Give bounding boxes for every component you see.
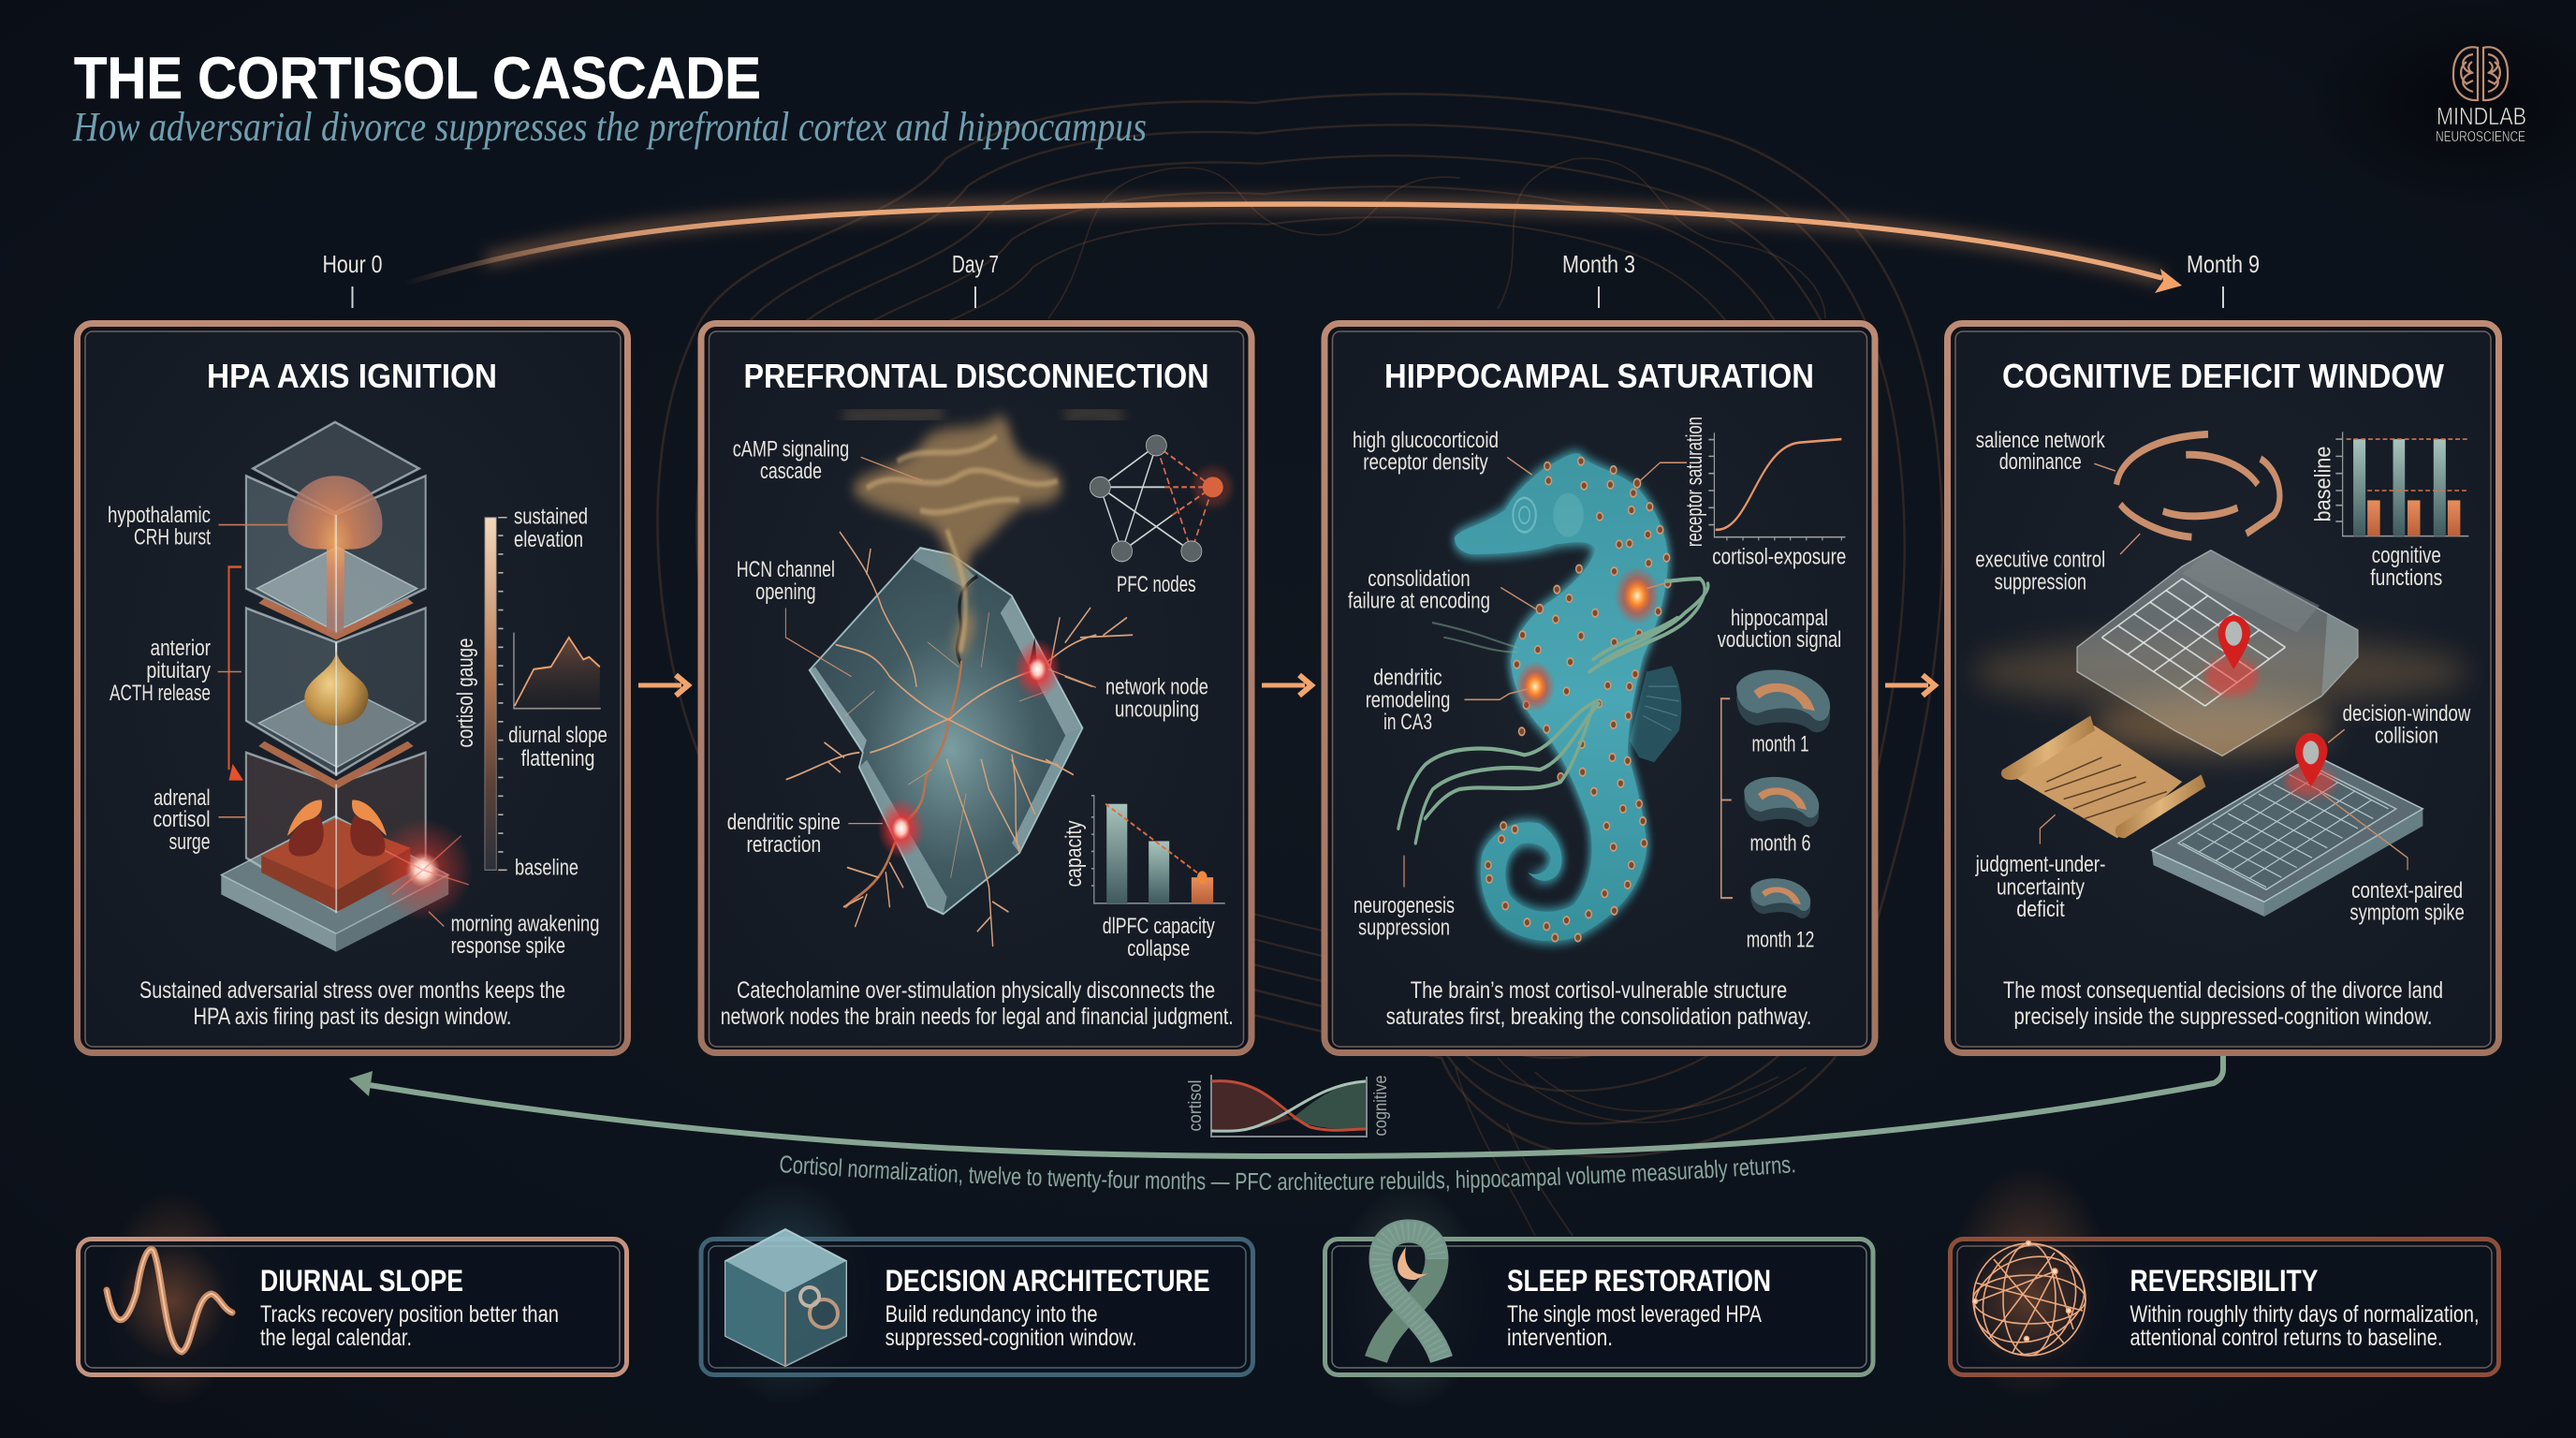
chart: receptor saturation curve xyxy=(1682,417,1845,547)
heading: HIPPOCAMPAL SATURATION xyxy=(1384,357,1814,395)
labels: uncoupling xyxy=(1115,697,1199,723)
labels: failure at encoding xyxy=(1348,588,1490,614)
illustration: seahorse hippocampus xyxy=(1398,453,1708,942)
panel caption xyxy=(721,977,1234,1030)
card: sleep restoration: SLEEP RESTORATION xyxy=(1507,1264,1771,1298)
labels: neurogenesis xyxy=(1354,893,1455,918)
timeline marker: Day 7 xyxy=(952,250,999,308)
labels: ACTH release xyxy=(110,681,211,706)
labels: cognitive xyxy=(2372,543,2441,568)
recovery arc: return arrow xyxy=(349,1056,2223,1156)
illustration: shrinking hippocampal slices xyxy=(1721,670,1830,918)
panel caption: Catecholamine over-stimulation physically disconnects the xyxy=(737,977,1215,1004)
labels xyxy=(108,503,607,959)
labels: consolidation xyxy=(1368,566,1471,592)
card: diurnal slope: Tracks recovery position better than xyxy=(260,1301,559,1328)
icon: wireframe sphere xyxy=(1963,1231,2096,1368)
subtitle: How adversarial divorce suppresses the prefrontal cortex and hippocampus xyxy=(72,104,1147,150)
labels: suppression xyxy=(1358,915,1450,940)
timeline marker: Month 9 xyxy=(2187,250,2260,308)
logo: NEUROSCIENCE xyxy=(2436,129,2525,145)
card: diurnal slope: DIURNAL SLOPE xyxy=(260,1264,463,1298)
labels: executive control xyxy=(1975,548,2105,573)
panel: prefrontal disconnection xyxy=(701,324,1251,1052)
card: reversibility xyxy=(1950,1166,2499,1400)
labels: deficit xyxy=(2016,897,2065,922)
card: diurnal slope: the legal calendar. xyxy=(260,1325,412,1351)
labels: collision xyxy=(2375,723,2438,748)
panel caption: The most consequential decisions of the divorce land xyxy=(2003,977,2443,1004)
labels: HCN channel xyxy=(737,557,835,582)
labels: cascade xyxy=(760,459,822,484)
panel caption xyxy=(139,977,565,1030)
labels: decision-window xyxy=(2343,701,2471,726)
labels: response spike xyxy=(451,933,565,959)
labels: in CA3 xyxy=(1383,710,1432,735)
timeline marker: Hour 0: Hour 0 xyxy=(322,250,382,278)
illustration: glass calendar tray, scroll and tablet xyxy=(1972,463,2468,917)
chart: receptor saturation curve: receptor saturation xyxy=(1682,417,1707,547)
illustration: glass cube stack xyxy=(218,422,473,952)
logo xyxy=(2312,0,2576,206)
panel caption: precisely inside the suppressed-cognition window. xyxy=(2014,1004,2432,1030)
card: decision architecture: suppressed-cognition window. xyxy=(886,1325,1137,1351)
recovery caption on curve: Cortisol normalization, twelve to twenty-four months — PFC architecture rebuilds, hippocampal volume measurably returns. xyxy=(781,1155,1795,1193)
panel caption xyxy=(2003,977,2443,1030)
labels: hypothalamic xyxy=(108,503,211,528)
labels: hippocampal xyxy=(1731,606,1828,631)
bar chart: dlPFC capacity xyxy=(1061,796,1225,903)
card: sleep restoration: intervention. xyxy=(1507,1325,1613,1351)
labels: surge xyxy=(168,829,210,855)
labels: dlPFC capacity xyxy=(1103,914,1215,939)
panel: HPA axis ignition xyxy=(77,324,627,1052)
labels: context-paired xyxy=(2351,878,2463,903)
labels: elevation xyxy=(514,527,583,552)
labels: judgment-under- xyxy=(1975,852,2105,877)
labels: morning awakening xyxy=(451,912,599,937)
timeline arc: escalation arrow xyxy=(404,204,2182,293)
labels: salience network xyxy=(1976,428,2106,453)
timeline marker: Day 7: Day 7 xyxy=(952,250,999,278)
card: sleep restoration: The single most leveraged HPA xyxy=(1507,1301,1762,1328)
labels: pituitary xyxy=(146,658,211,683)
labels: month 12 xyxy=(1747,927,1814,952)
labels: adrenal xyxy=(154,785,210,811)
chart: cortisol gauge xyxy=(453,518,601,870)
card: sleep restoration xyxy=(1325,1184,1873,1409)
title: THE CORTISOL CASCADE xyxy=(74,46,761,111)
labels: cortisol xyxy=(154,807,210,832)
labels: receptor density xyxy=(1363,449,1488,476)
labels: high glucocorticoid xyxy=(1353,428,1499,453)
panel caption xyxy=(1386,977,1811,1030)
background brain contours xyxy=(658,94,1942,1236)
timeline marker: Hour 0 xyxy=(322,250,382,308)
card: diurnal slope xyxy=(79,1191,627,1406)
icon: cortisol wave xyxy=(107,1249,232,1352)
icon: glass cube with gears xyxy=(725,1229,846,1366)
chart: cortisol gauge: cortisol gauge xyxy=(453,638,478,748)
labels xyxy=(1348,428,1846,952)
labels: month 6 xyxy=(1750,830,1810,856)
labels: uncertainty xyxy=(1997,874,2085,901)
heading: PREFRONTAL DISCONNECTION xyxy=(743,357,1209,395)
card: decision architecture xyxy=(701,1180,1252,1404)
icon: green ribbon with moon xyxy=(1376,1231,1442,1359)
labels: CRH burst xyxy=(134,524,211,550)
labels: sustained xyxy=(514,504,588,530)
arrow: panel 1 to 2 xyxy=(638,675,688,696)
labels: remodeling xyxy=(1366,688,1450,713)
labels: cAMP signaling xyxy=(733,436,849,462)
labels: functions xyxy=(2370,565,2442,591)
mini chart: cortisol versus cognition: cognitive xyxy=(1371,1075,1391,1137)
icon: brain xyxy=(2453,47,2508,100)
bar chart: cognitive functions: baseline xyxy=(2311,446,2336,522)
card: decision architecture: Build redundancy into the xyxy=(886,1301,1098,1328)
timeline marker: Month 3: Month 3 xyxy=(1562,250,1635,278)
panel: hippocampal saturation xyxy=(1325,324,1875,1052)
mini chart: cortisol versus cognition xyxy=(1186,1075,1391,1137)
heading: HPA AXIS IGNITION xyxy=(207,357,497,395)
labels: diurnal slope xyxy=(508,723,607,748)
panel caption: The brain’s most cortisol-vulnerable structure xyxy=(1411,977,1787,1004)
card: reversibility: REVERSIBILITY xyxy=(2130,1264,2318,1298)
labels: suppression xyxy=(1995,570,2086,595)
labels: month 1 xyxy=(1752,732,1808,757)
labels: network node xyxy=(1105,674,1208,700)
labels: dominance xyxy=(1999,449,2082,475)
heading: COGNITIVE DEFICIT WINDOW xyxy=(2002,357,2444,395)
card: reversibility: Within roughly thirty days of normalization, xyxy=(2130,1301,2479,1328)
illustration: fractured glass slab with dendrites xyxy=(785,412,1133,946)
labels: retraction xyxy=(747,832,821,858)
labels xyxy=(727,436,1215,961)
labels: anterior xyxy=(150,636,211,661)
labels: baseline xyxy=(515,856,578,880)
panel caption: network nodes the brain needs for legal and financial judgment. xyxy=(721,1004,1234,1030)
bar chart: cognitive functions xyxy=(2311,432,2468,536)
labels: dendritic spine xyxy=(727,810,841,835)
labels xyxy=(1975,428,2471,926)
labels: cortisol-exposure xyxy=(1712,544,1846,569)
labels: symptom spike xyxy=(2349,901,2465,926)
mini chart: cortisol versus cognition: cortisol xyxy=(1186,1080,1206,1131)
timeline marker: Month 9: Month 9 xyxy=(2187,250,2260,278)
timeline marker: Month 3 xyxy=(1562,250,1635,308)
bar chart: dlPFC capacity: capacity xyxy=(1061,820,1087,888)
panel caption: Sustained adversarial stress over months keeps the xyxy=(139,977,565,1004)
arrow: panel 3 to 4 xyxy=(1885,675,1935,696)
network diagram: PFC nodes xyxy=(1090,435,1232,562)
labels: PFC nodes xyxy=(1117,572,1196,597)
panel caption: HPA axis firing past its design window. xyxy=(193,1004,511,1030)
icon: fractured network rings xyxy=(2116,434,2279,537)
panel: cognitive deficit window xyxy=(1947,324,2499,1052)
card: reversibility: attentional control returns to baseline. xyxy=(2130,1325,2443,1351)
logo: MINDLAB xyxy=(2437,102,2526,130)
labels: dendritic xyxy=(1373,666,1442,691)
labels: voduction signal xyxy=(1718,627,1841,653)
labels: collapse xyxy=(1127,936,1190,961)
card: decision architecture: DECISION ARCHITECTURE xyxy=(886,1264,1210,1298)
panel caption: saturates first, breaking the consolidation pathway. xyxy=(1386,1004,1811,1030)
labels: opening xyxy=(755,580,816,605)
arrow: panel 2 to 3 xyxy=(1262,675,1311,696)
labels: flattening xyxy=(521,746,594,771)
